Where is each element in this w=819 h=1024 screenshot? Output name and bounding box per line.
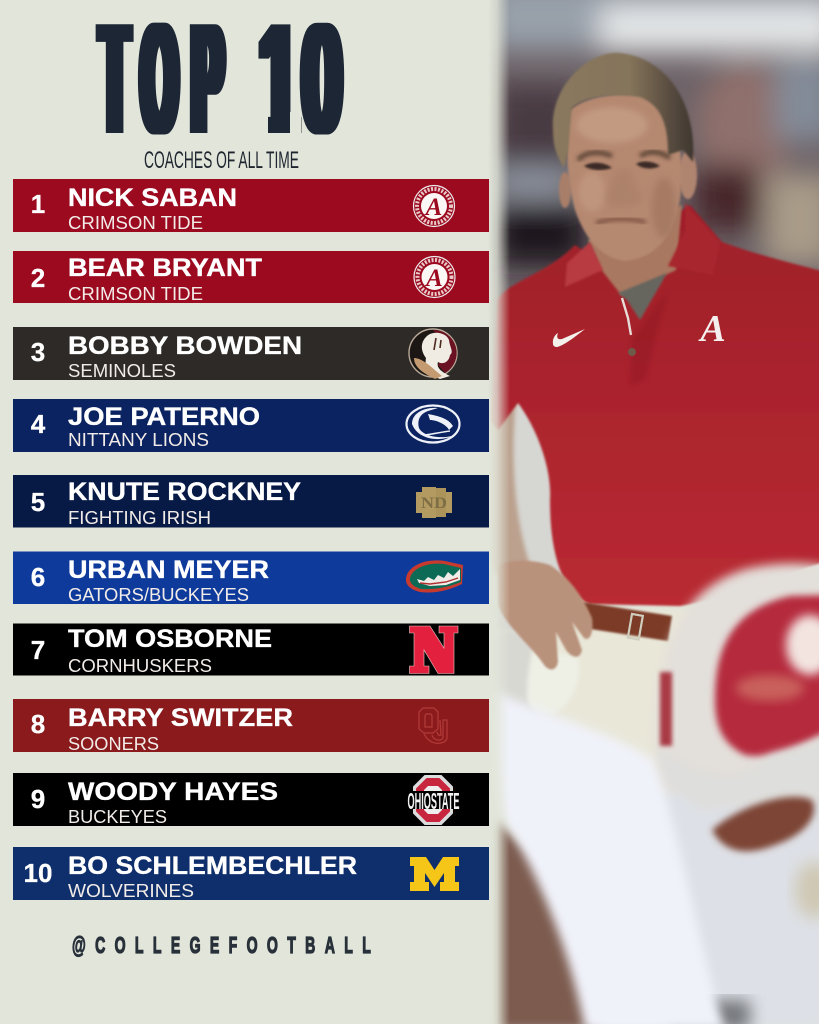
row 10 bar: [13, 847, 489, 900]
icon: Michigan logo: [410, 857, 459, 891]
row 2 team: CRIMSON TIDE: [68, 283, 203, 304]
row 7 name: TOM OSBORNE: [68, 625, 272, 653]
belt buckle: [628, 614, 643, 639]
row 9 team: BUCKEYES: [68, 806, 167, 827]
row 6 rank: 6: [31, 562, 45, 592]
hand: [497, 561, 593, 670]
icon: Alabama logo: A: [424, 265, 443, 292]
row 5 bar: [13, 475, 489, 528]
helmet glare: [786, 615, 819, 675]
row 8 bar: [13, 699, 489, 752]
row 10 team: WOLVERINES: [68, 880, 194, 901]
row 2 rank: 2: [31, 263, 45, 293]
row 5 rank: 5: [31, 487, 45, 517]
row 4 rank: 4: [31, 409, 46, 439]
swoosh: [553, 329, 585, 347]
row 10: [13, 847, 489, 901]
eyes: [584, 162, 660, 170]
row 8 rank: 8: [31, 709, 45, 739]
hair: [553, 53, 693, 168]
handle: @COLLEGEFOOTBALL: [72, 932, 371, 959]
row 4 bar: [13, 399, 489, 452]
row 8 team: SOONERS: [68, 733, 159, 754]
icon: Nebraska logo: [410, 626, 458, 674]
icon: Alabama logo: A: [424, 194, 442, 221]
photo: blurred stadium crowd: [488, 0, 819, 720]
row 7 team: CORNHUSKERS: [68, 655, 212, 676]
row 2 name: BEAR BRYANT: [68, 254, 263, 282]
white sleeve: [492, 690, 725, 1024]
left cheek light: [580, 174, 604, 210]
helmet pink blob: [736, 675, 804, 701]
neck: [588, 205, 682, 296]
row 10 rank: 10: [24, 858, 52, 888]
row 2 bar: [13, 251, 489, 303]
row 5: [13, 475, 489, 528]
player body: [670, 795, 819, 1024]
bottom right tan: [795, 862, 819, 918]
row 1 bar: [13, 179, 489, 232]
row 9: OHIOSTATE: [408, 788, 460, 814]
ear right: [679, 151, 697, 199]
helmet red: [715, 595, 819, 756]
brows: [578, 152, 670, 160]
subtitle: COACHES OF ALL TIME: [144, 147, 299, 174]
mouth: [596, 219, 646, 223]
helmet left stripe: [660, 672, 672, 746]
row 2: [13, 251, 489, 304]
row 8: [13, 699, 489, 754]
icon: Alabama logo: [414, 186, 454, 226]
ear left: [559, 172, 571, 208]
icon: Notre Dame logo: ND: [421, 495, 447, 512]
placket line: [622, 298, 631, 335]
photo: coach on the sideline: [488, 0, 819, 1024]
row 9 rank: 9: [31, 784, 45, 814]
row 4 name: JOE PATERNO: [68, 403, 260, 431]
icon: Penn State logo: [406, 406, 460, 442]
lower left brown: [495, 820, 600, 1024]
row 8 name: BARRY SWITZER: [68, 704, 293, 732]
icon: Florida Gators logo: [406, 560, 463, 593]
row 9: [13, 773, 489, 827]
photo: coach figure: [490, 53, 819, 770]
row 7 bar: [13, 624, 489, 676]
row 6 bar: [13, 552, 489, 604]
row 4 team: NITTANY LIONS: [68, 429, 209, 450]
placket: [631, 304, 662, 382]
helmet shell: [663, 556, 819, 642]
row 1 name: NICK SABAN: [68, 184, 237, 212]
icon: Oklahoma logo: [419, 708, 447, 743]
row 9 bar: [13, 773, 489, 826]
icon: Notre Dame logo: [416, 487, 452, 518]
polo shirt: [490, 205, 819, 606]
row 1 rank: 1: [31, 189, 45, 219]
photo: blurred foreground helmet and player: [492, 564, 819, 1024]
row 1 team: CRIMSON TIDE: [68, 212, 203, 233]
right cheek shadow: [652, 178, 676, 238]
face: [567, 94, 682, 261]
A on shirt: A: [698, 308, 726, 350]
row 3 team: SEMINOLES: [68, 360, 176, 381]
undershirt: [618, 273, 667, 320]
shirt button: [628, 348, 636, 356]
icon: Ohio State logo: [407, 776, 460, 824]
row 9 name: WOODY HAYES: [68, 778, 278, 806]
row 6: [13, 552, 489, 605]
helmet slot: [712, 797, 814, 851]
row 3: [13, 327, 489, 381]
icon: Alabama logo: [414, 256, 455, 298]
row 6 name: URBAN MEYER: [68, 556, 269, 584]
nose: [607, 170, 642, 207]
row 4: [13, 399, 489, 452]
row 7: [13, 624, 489, 676]
icon: Florida State logo: [409, 329, 457, 379]
row 5 name: KNUTE ROCKNEY: [68, 478, 301, 506]
belt: [582, 602, 672, 641]
collar left: [565, 242, 603, 287]
row 5 team: FIGHTING IRISH: [68, 507, 211, 528]
left edge fade: [488, 0, 510, 1024]
title: [101, 0, 342, 168]
collar right: [667, 203, 708, 269]
row 3 name: BOBBY BOWDEN: [68, 332, 302, 360]
arm: [494, 404, 530, 572]
forehead light: [576, 107, 648, 143]
row 1: [13, 179, 489, 233]
pants: [545, 610, 690, 770]
row 10 name: BO SCHLEMBECHLER: [68, 852, 357, 880]
facemask: [660, 740, 819, 810]
bottom dark: [710, 994, 760, 1024]
row 3 bar: [13, 327, 489, 380]
row 7 rank: 7: [31, 635, 45, 665]
row 3 rank: 3: [31, 337, 45, 367]
towel: [527, 648, 579, 714]
row 6 team: GATORS/BUCKEYES: [68, 584, 249, 605]
